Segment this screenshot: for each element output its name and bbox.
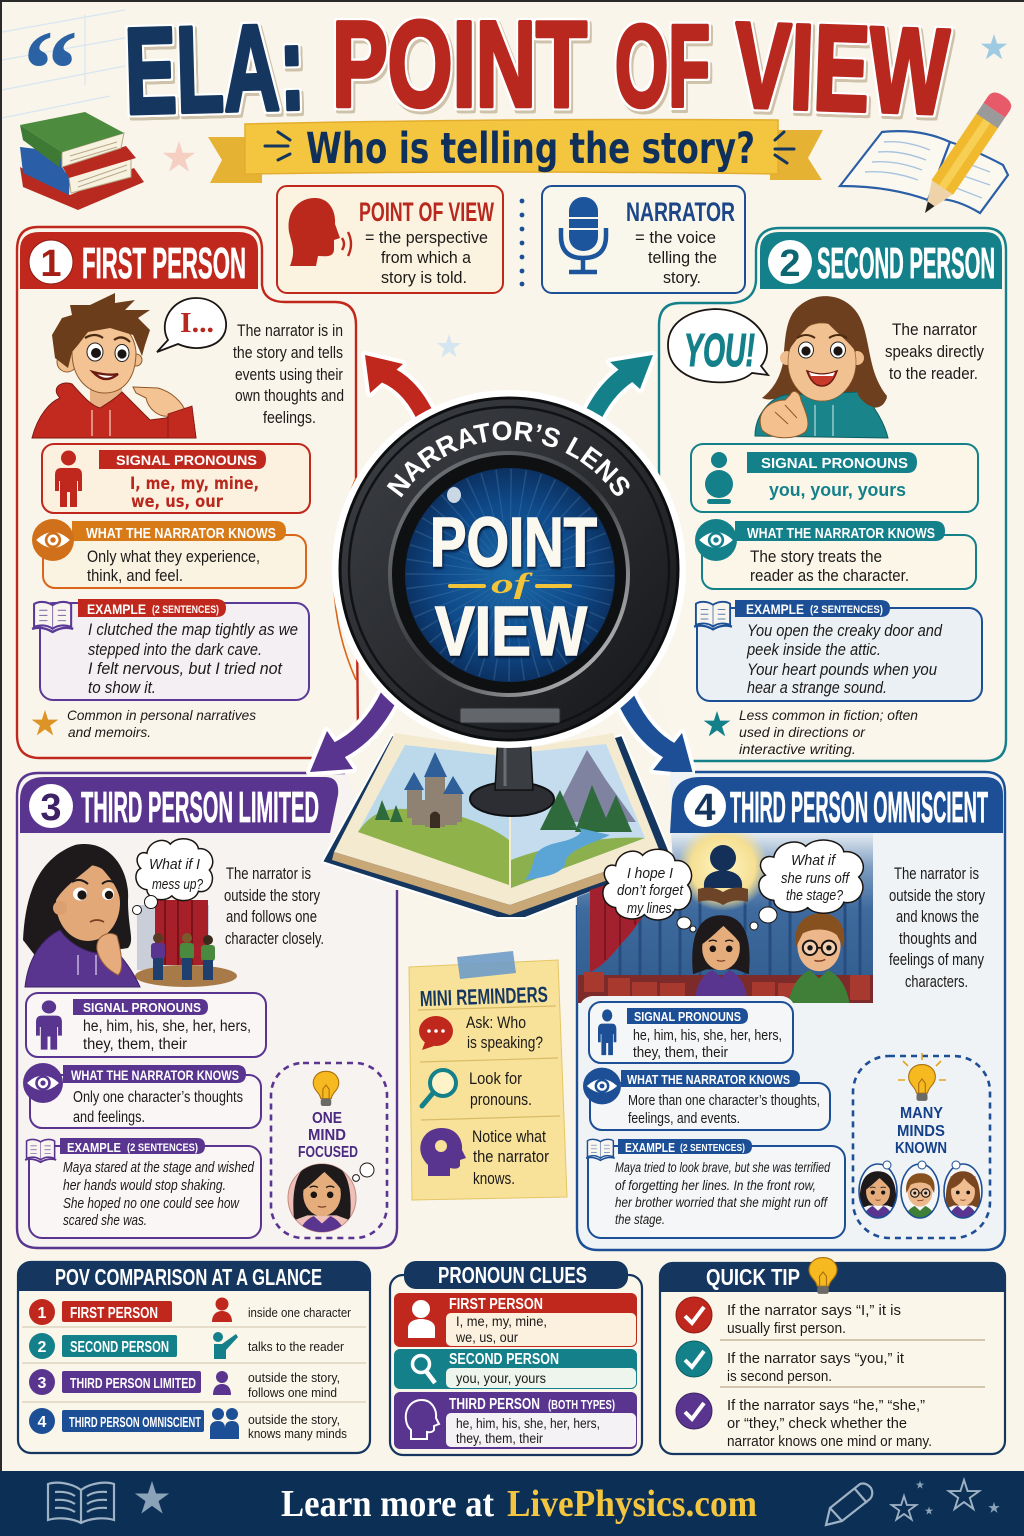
text: first person description: feelings. [263,408,316,427]
reminder: look for pronouns: pronouns. [470,1090,532,1109]
box: what the narrator knows: Only one character’s thoughts [73,1089,243,1106]
heading: second person [760,232,1002,289]
callout: many minds known [853,1053,990,1238]
row: third person limited: outside the story, [248,1370,340,1385]
tip: third person: or “they,” check whether the [727,1415,907,1432]
row: second person: 2 [38,1339,47,1356]
footer link text: Learn more at [281,1483,494,1525]
clue: second person: you, your, yours [456,1371,546,1386]
text: third person omniscient description: feelings of many [889,950,984,969]
box: what the narrator knows: WHAT THE NARRATOR KNOWS [86,525,276,542]
box: example [586,1139,845,1238]
callout: one mind focused [271,1063,387,1246]
lens connector word [450,568,570,600]
clue: third person: he, him, his, she, her, hers, [456,1416,600,1431]
title: OF [615,1,710,131]
box: example: I felt nervous, but I tried not [88,660,283,678]
heading: first person [20,232,258,289]
icon: open book and pencil [840,89,1015,220]
thought cloud: girl: don’t forget [617,882,684,899]
sticky note: mini reminders [409,951,567,1200]
box: example [694,600,982,701]
reminder: notice what narrator knows: the narrator [473,1147,549,1166]
text: third person limited description: and follows one [226,907,317,926]
arrow: to third person omniscient [622,690,693,774]
box: example: (2 SENTENCES) [810,604,883,616]
text: third person omniscient description: and knows the [896,907,979,926]
panel: third person limited [17,773,397,1248]
box: what the narrator knows: WHAT THE NARRATOR KNOWS [747,525,935,542]
thought cloud: boy: she runs off [781,870,851,887]
star: pink [163,141,195,172]
row: third person limited: 3 [38,1375,47,1392]
box: signal pronouns: they, them, their [633,1045,728,1061]
row: third person omniscient: outside the story, [248,1412,340,1427]
heading: POV comparison: POV COMPARISON AT A GLANCE [55,1264,322,1290]
box: signal pronouns [26,993,266,1057]
text: third person omniscient description: outside the story [889,886,985,905]
reminder: look for pronouns [422,1069,532,1109]
icon: footer book [48,1483,114,1523]
arrow: to third person limited [310,690,392,772]
icon: microphone [561,197,606,272]
icon: footer pencil [826,1484,872,1525]
box: example: (2 SENTENCES) [127,1142,198,1154]
lens stand [470,735,554,816]
reminder: notice what narrator knows: knows. [473,1169,515,1188]
row: second person: SECOND PERSON [70,1339,169,1356]
note: first person usage: and memoirs. [68,724,151,740]
panel: point of view definition [277,186,503,293]
reminder: ask who is speaking [419,1013,543,1052]
text: third person limited description [224,864,324,948]
tip: second person: is second person. [727,1368,832,1385]
panel: second person [659,228,1006,761]
row: third person limited: follows one mind [248,1385,337,1400]
thought cloud: what if I mess up: What if I [149,856,200,873]
box: example: of forgetting her lines. In the front row, [615,1178,816,1193]
text: third person limited description: character closely. [225,929,324,948]
panel: narrator definition: telling the [648,248,717,267]
panel: third person limited: THIRD PERSON LIMITED [81,783,319,832]
note: first person usage: Common in personal narratives [67,707,256,723]
footer link text: LivePhysics.com [507,1483,757,1525]
clue: second person: SECOND PERSON [449,1351,559,1368]
box: example: her brother worried that she might run off [615,1195,828,1210]
arrow: to second person [590,355,653,422]
tip: second person [676,1341,905,1385]
divider dots [520,199,524,286]
text: first person description: The narrator is in [237,321,343,340]
footer link text [281,1483,757,1525]
panel: point of view definition: = the perspective [365,228,488,247]
speech bubble: I...: I... [180,308,214,339]
text: third person omniscient description: characters. [905,972,968,991]
note heading: MINI REMINDERS [419,982,548,1011]
panel: POV comparison [18,1262,370,1453]
panel: point of view definition: from which a [381,248,471,267]
clue: first person: FIRST PERSON [449,1296,543,1313]
box: example: You open the creaky door and [747,622,943,640]
note: first person usage [32,707,256,740]
row: first person: 1 [38,1305,47,1322]
panel: third person omniscient [577,772,1005,1250]
lens connector word: of [491,568,534,600]
text: first person description: own thoughts and [235,386,344,405]
illustration: girl thinking and stage [23,839,237,987]
box: what the narrator knows [32,519,306,588]
row: third person omniscient: 4 [38,1414,47,1431]
icon: speaking head [289,198,351,266]
box: what the narrator knows: reader as the character. [750,566,909,585]
speech bubble: I... [157,298,226,352]
panel: quick tip [660,1258,1005,1454]
panel: pronoun clues [390,1261,642,1455]
box: signal pronouns: he, him, his, she, her, hers, [633,1028,782,1044]
lens arc label: NARRATOR’S LENS [386,421,630,498]
thought cloud: what if I mess up: mess up? [152,876,204,893]
row: third person limited [29,1369,340,1400]
box: example: EXAMPLE [746,601,804,617]
illustration: boy pointing at himself [32,293,226,438]
heading: quick tip [660,1258,1005,1294]
subtitle ribbon: Who is telling the story? [306,124,755,174]
box: what the narrator knows [23,1063,261,1128]
reminder: notice what narrator knows: Notice what [472,1127,546,1146]
text: third person limited description: The narrator is [226,864,311,883]
footer band [0,1471,1024,1536]
panel: narrator definition: = the voice [635,228,716,247]
text: first person description: events using their [235,365,343,384]
illustration: open storybook [322,733,673,918]
tip: first person [676,1297,901,1337]
panel: first person [17,227,358,758]
panel: point of view definition: story is told. [381,268,467,287]
tape [457,951,516,979]
box: signal pronouns: they, them, their [83,1036,187,1053]
callout: one mind focused: FOCUSED [298,1144,358,1161]
note: second person usage: used in directions or [739,724,866,740]
note: second person usage: Less common in fiction; often [739,707,918,723]
note: second person usage [704,707,918,757]
lens title: VIEW [435,592,587,670]
thought cloud: girl: my lines. [627,900,675,917]
box: what the narrator knows: WHAT THE NARRATOR KNOWS [627,1072,790,1087]
text: first person description [233,321,344,427]
clue: third person: (BOTH TYPES) [548,1397,615,1412]
centerpiece: narrator's lens on a book [306,351,696,919]
box: what the narrator knows: Only what they experience, [87,547,260,566]
tip: third person [676,1393,932,1450]
box: example: Maya stared at the stage and wished [63,1160,255,1176]
note: second person usage: interactive writing. [739,741,856,757]
text: second person description [885,320,984,383]
tip: third person: narrator knows one mind or many. [727,1433,932,1450]
speech bubble: YOU!: YOU! [684,324,755,376]
icon: footer stars [892,1480,1000,1520]
heading: third person limited [20,777,338,833]
clue: first person: I, me, my, mine, [456,1314,547,1329]
thought cloud: boy: What if [791,852,837,869]
box: example: to show it. [88,679,156,697]
heading: second person: 2 [779,243,801,285]
box: example: EXAMPLE [625,1141,675,1155]
box: example: Your heart pounds when you [747,661,937,679]
star: lens top [437,334,461,358]
box: what the narrator knows: and feelings. [73,1109,145,1126]
box: example: stepped into the dark cave. [88,641,262,659]
clue: first person [394,1293,637,1347]
row: first person: inside one character [248,1305,352,1320]
heading: third person omniscient [670,777,1003,833]
box: signal pronouns: you, your, yours [769,480,906,500]
box: signal pronouns [691,444,978,512]
text: third person omniscient description: The narrator is [894,864,979,883]
text: first person description: the story and tells [233,343,343,362]
reminder: look for pronouns: Look for [469,1069,522,1088]
box: signal pronouns: SIGNAL PRONOUNS [634,1010,741,1024]
title: POINT [332,0,587,132]
row: second person: talks to the reader [248,1339,345,1354]
heading: first person: 1 [40,243,62,285]
icon: footer star [135,1481,169,1514]
heading: third person limited: 3 [40,787,62,829]
box: example: hear a strange sound. [747,679,887,697]
panel: narrator definition [542,186,745,293]
thought cloud: what if I mess up [132,839,213,914]
lens title: POINT [430,503,597,581]
reminder: ask who is speaking: is speaking? [467,1033,543,1052]
magnifying lens [332,390,686,748]
panel: narrator definition: story. [663,268,701,287]
clue: first person: we, us, our [455,1330,518,1345]
speech bubble: YOU! [668,309,768,382]
heading: third person omniscient: 4 [694,787,716,829]
box: example: EXAMPLE [87,601,146,617]
text: second person description: speaks directly [885,342,984,361]
text: third person omniscient description [889,864,985,991]
row: first person: FIRST PERSON [70,1305,158,1322]
row: third person omniscient: knows many minds [248,1426,347,1441]
subtitle ribbon [208,120,823,183]
box: example: I clutched the map tightly as we [88,621,298,639]
panel: narrator definition: NARRATOR [626,197,735,227]
box: what the narrator knows: feelings, and events. [628,1111,740,1127]
box: example: the stage. [615,1212,665,1227]
callout: many minds known: MINDS [897,1123,945,1140]
row: third person omniscient: THIRD PERSON OMNISCIENT [69,1414,201,1431]
box: example: Maya tried to look brave, but she was terrified [615,1160,830,1175]
box: signal pronouns: SIGNAL PRONOUNS [116,452,257,468]
row: second person [29,1332,345,1359]
callout: one mind focused: MIND [308,1127,346,1144]
clue: third person: THIRD PERSON [449,1396,540,1413]
tip: third person: If the narrator says “he,” “she,” [727,1397,925,1414]
box: example [32,599,309,700]
callout: one mind focused: ONE [312,1110,342,1127]
text: third person omniscient description: thoughts and [899,929,977,948]
box: example [25,1138,261,1238]
box: example: She hoped no one could see how [63,1196,240,1212]
box: signal pronouns: we, us, our [131,492,224,512]
text: second person description: The narrator [892,320,977,339]
row: first person [29,1298,352,1325]
heading: pronoun clues: PRONOUN CLUES [438,1262,587,1288]
box: what the narrator knows: think, and feel. [87,566,183,585]
box: signal pronouns: SIGNAL PRONOUNS [83,1000,201,1015]
box: what the narrator knows: WHAT THE NARRATOR KNOWS [71,1067,239,1083]
tip: second person: If the narrator says “you,” it [727,1350,905,1367]
text: second person description: to the reader. [889,364,978,383]
thought cloud: girl: I hope I [627,865,673,882]
box: what the narrator knows [695,519,976,589]
box: signal pronouns: he, him, his, she, her, hers, [83,1018,251,1035]
arrow: to first person [365,355,428,422]
box: what the narrator knows: More than one character’s thoughts, [628,1093,820,1109]
box: example: peek inside the attic. [746,641,881,659]
clue: third person [394,1392,637,1449]
clue: third person: they, them, their [456,1431,543,1446]
box: example: her hands would stop shaking. [63,1178,226,1194]
icon: stacked books [20,112,144,210]
box: signal pronouns [579,996,795,1066]
panel: point of view definition: POINT OF VIEW [359,197,494,227]
box: example: EXAMPLE [67,1140,121,1155]
heading: first person: FIRST PERSON [82,239,246,288]
heading: quick tip: QUICK TIP [706,1264,800,1290]
notebook paper lines [2,10,125,118]
reminder: ask who is speaking: Ask: Who [466,1013,526,1032]
box: signal pronouns: SIGNAL PRONOUNS [761,456,908,472]
illustration: theatre scene [577,823,873,1004]
tip: first person: usually first person. [727,1320,846,1337]
box: example: (2 SENTENCES) [680,1142,745,1154]
box: signal pronouns: I, me, my, mine, [130,474,259,494]
tip: first person: If the narrator says “I,” it is [727,1302,901,1319]
illustration: girl pointing at reader [668,296,888,438]
reminder: notice what narrator knows [420,1127,549,1188]
box: what the narrator knows [583,1068,830,1130]
decorative quote mark: “ [23,8,78,130]
star: top right [981,34,1007,59]
box: example: scared she was. [63,1213,147,1229]
text: third person limited description: outside the story [224,886,320,905]
title: ELA: [123,0,307,139]
clue: second person [394,1349,637,1389]
box: example: (2 SENTENCES) [152,604,219,616]
title [123,0,951,140]
lens title [430,503,597,670]
thought cloud: girl [603,849,696,932]
thought cloud: boy: the stage? [786,887,844,904]
callout: many minds known: KNOWN [895,1140,947,1157]
callout: many minds known: MANY [900,1105,944,1122]
row: third person limited: THIRD PERSON LIMITED [70,1375,196,1392]
thought cloud: boy [750,840,863,930]
box: signal pronouns [42,444,310,513]
box: what the narrator knows: The story treats the [750,547,882,566]
row: third person omniscient [29,1408,347,1441]
